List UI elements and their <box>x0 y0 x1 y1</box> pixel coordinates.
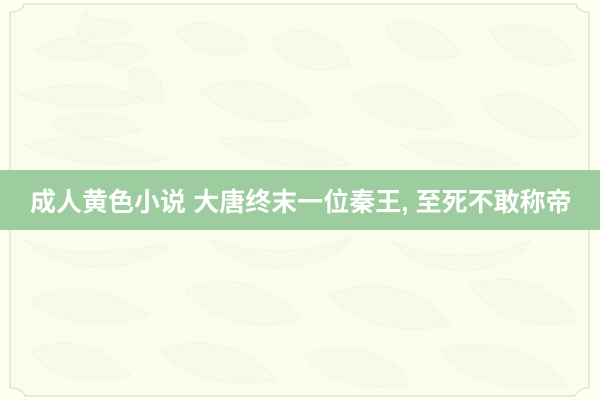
title: 成人黄色小说 大唐终末一位秦王, 至死不敢称帝 <box>30 187 572 217</box>
title band <box>0 170 600 230</box>
